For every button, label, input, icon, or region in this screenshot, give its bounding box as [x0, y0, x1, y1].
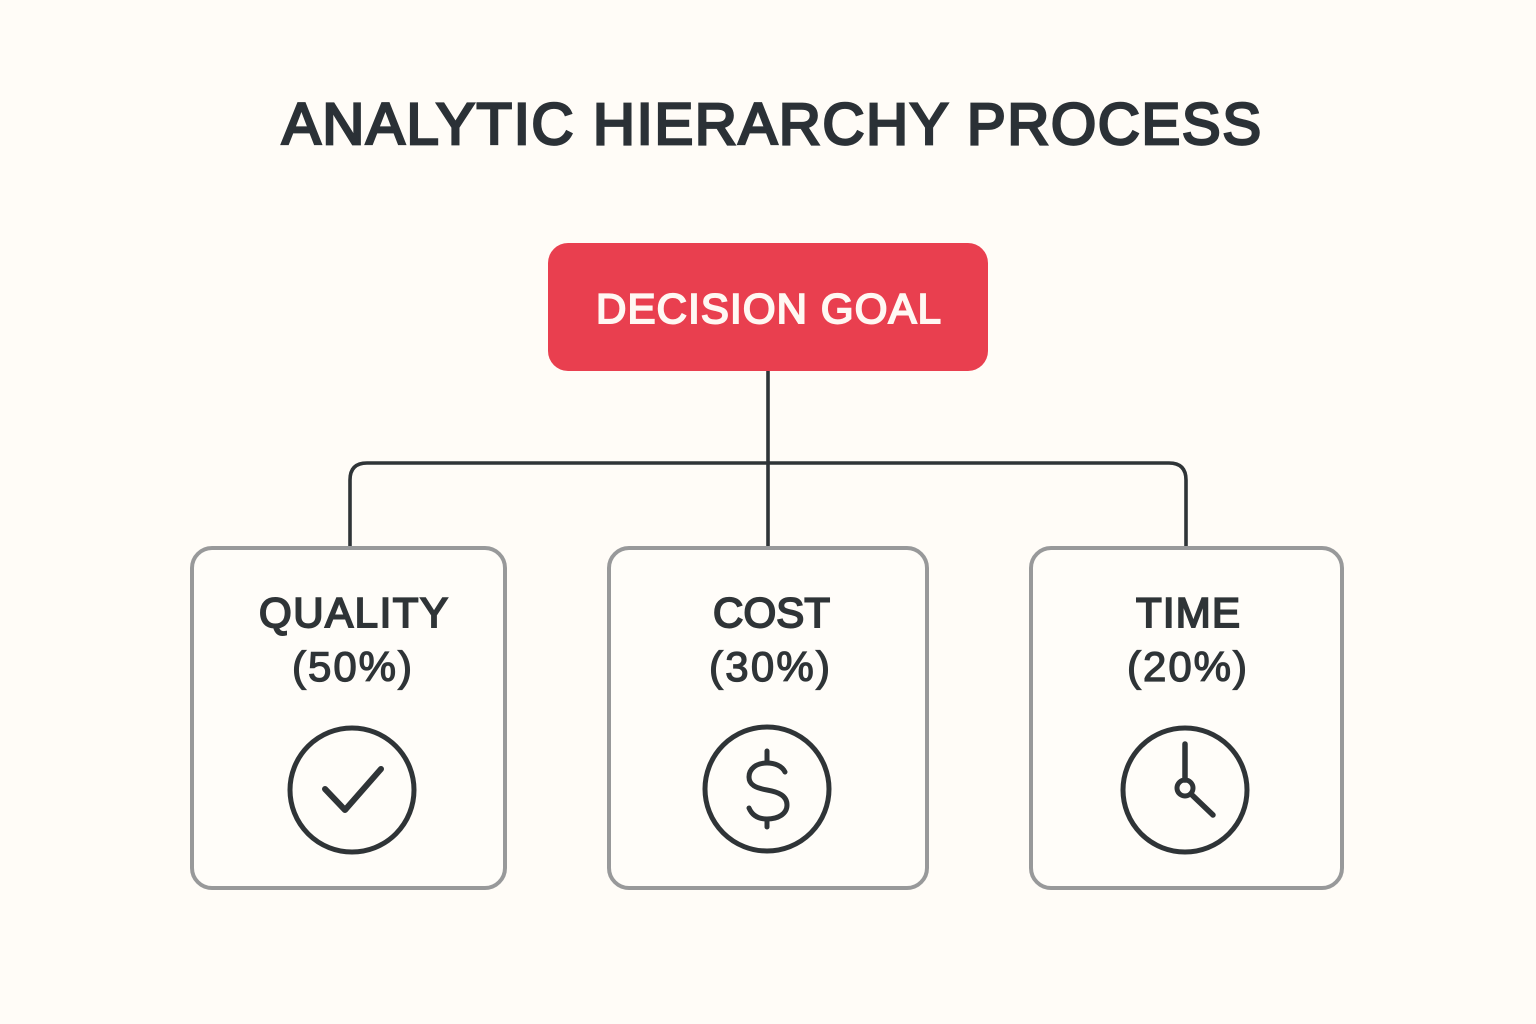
decision goal box: DECISION GOAL [596, 285, 941, 332]
title: ANALYTIC HIERARCHY PROCESS [282, 92, 1261, 157]
quality label [259, 589, 448, 690]
icon: check mark [290, 728, 414, 852]
panel: cost [609, 548, 927, 888]
time label [1127, 589, 1247, 690]
panel: time [1031, 548, 1342, 888]
quality label: (50%) [292, 643, 412, 690]
time label: (20%) [1127, 643, 1247, 690]
icon: dollar [705, 727, 829, 851]
panel: quality [192, 548, 505, 888]
time label: TIME [1136, 589, 1240, 636]
connector lines [350, 370, 1186, 546]
icon: clock [1123, 728, 1247, 852]
quality label: QUALITY [259, 589, 448, 636]
cost label [709, 589, 830, 690]
decision goal box [548, 243, 988, 371]
cost label: (30%) [709, 643, 830, 690]
cost label: COST [713, 589, 830, 636]
